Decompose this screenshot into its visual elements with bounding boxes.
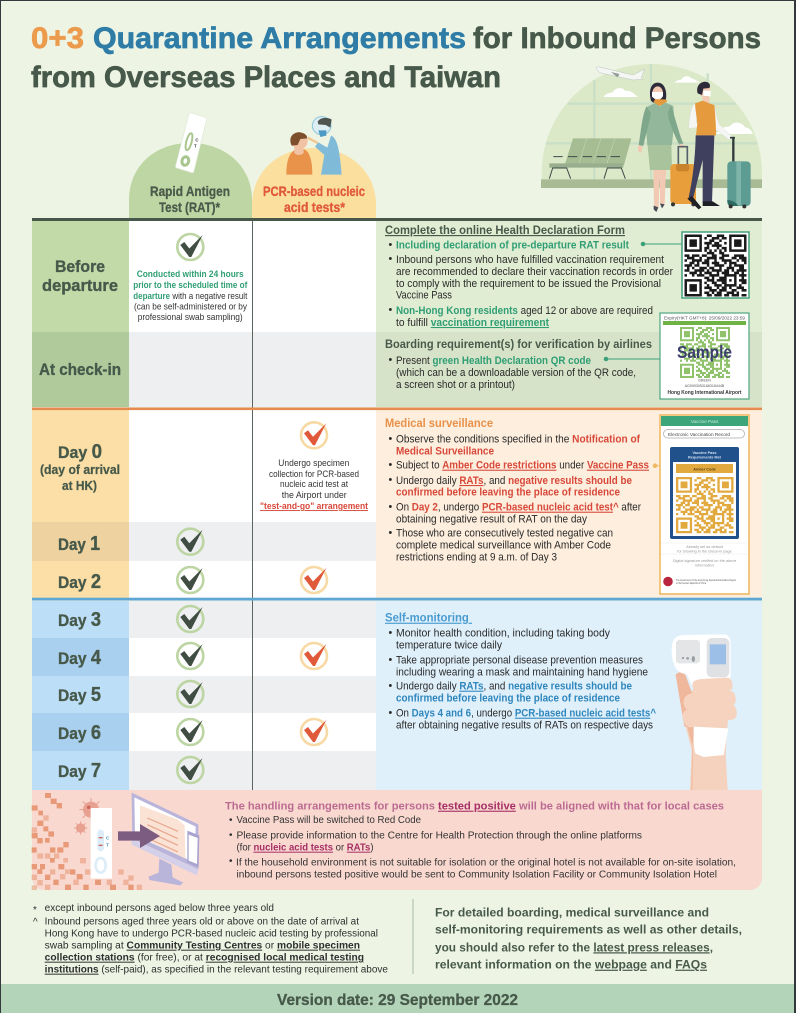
panel: medical surveillance (376, 410, 762, 598)
health declaration bullets: Inbound persons who have fulfilled vaccination requirement (396, 254, 664, 266)
self-monitoring bullets: • (388, 654, 392, 666)
row label: Day 3 (32, 601, 129, 638)
row label: Day 0: (day of arrival (40, 462, 120, 477)
positive case bullets: inbound persons tested positive would be sent to Community Isolation Facility or Community Isolation Hotel (236, 869, 717, 880)
illustration: test kit to computer: T (106, 843, 109, 848)
footnotes: * (33, 905, 37, 916)
footnotes: Inbound persons aged three years old or above on the date of arrival at (45, 917, 359, 928)
heading: boarding requirements: Boarding requirement(s) for verification by airlines (385, 338, 652, 351)
health declaration bullets: to comply with the requirement to be issued the Provisional (396, 278, 661, 290)
column header: PCR: acid tests* (284, 200, 346, 215)
RAT checks (177, 234, 203, 783)
boarding bullets: a screen shot or a printout) (396, 379, 515, 391)
positive case bullets (229, 815, 736, 880)
phone screen: vaccine pass amber code: Vaccine Pass (691, 419, 719, 424)
positive case bullets: (for nucleic acid tests or RATs) (236, 843, 373, 854)
row label: Day 0 (32, 410, 129, 522)
sample QR card: Hong Kong International Airport (668, 390, 742, 396)
surveillance bullets: • (388, 459, 392, 471)
icon: hand with thermometer (672, 634, 737, 790)
footnotes: collection stations (for free), or at recognised local medical testing (45, 953, 364, 964)
row label: Day 0: at HK) (62, 478, 97, 493)
phone screen: vaccine pass amber code: Digital signature verified on the above (673, 559, 736, 563)
footnotes: except inbound persons aged below three years old (45, 903, 274, 914)
sample QR card (660, 313, 749, 399)
self-monitoring bullets: • (388, 707, 392, 719)
row label: Day 6 (32, 713, 129, 751)
self-monitoring bullets: confirmed before leaving the place of residence (396, 693, 620, 705)
version date band: Version date: 29 September 2022 (277, 992, 518, 1009)
positive case bullets: Please provide information to the Centre for Health Protection through the online platforms (236, 831, 642, 842)
RAT pre-departure note: prior to the scheduled time of (133, 280, 248, 290)
QR code: health declaration (682, 232, 749, 298)
column header: PCR: PCR-based nucleic (263, 184, 365, 199)
PCR arrival note (260, 458, 368, 511)
man (687, 82, 732, 209)
footnotes: ^ (33, 917, 38, 928)
health declaration bullets: • (388, 253, 392, 265)
self-monitoring bullets: after obtaining negative results of RATs on respective days (396, 720, 653, 732)
table (32, 221, 376, 790)
footnotes: swab sampling at Community Testing Centres or mobile specimen (45, 941, 360, 952)
health declaration bullets: are recommended to declare their vaccination records in order (396, 266, 673, 278)
connector to phone (653, 464, 660, 468)
footnotes (33, 903, 389, 976)
icon: RAT test kit (176, 113, 207, 173)
positive case bullets: • (229, 830, 233, 841)
column header: RAT: Test (RAT)* (159, 200, 221, 215)
section dividers (32, 218, 762, 600)
PCR checks (301, 422, 327, 745)
self-monitoring bullets: • (388, 680, 392, 692)
title (31, 22, 761, 94)
self-monitoring bullets (388, 627, 656, 732)
phone screen: vaccine pass amber code: Already set as default (686, 545, 724, 549)
sample QR card: AG0993053166318444B (685, 384, 725, 388)
row label: Day 2: Day 2 (58, 571, 101, 593)
row label: Day 5 (32, 676, 129, 713)
further information note: you should also refer to the latest press releases, (435, 940, 713, 954)
woman (638, 83, 684, 212)
surveillance bullets: • (388, 474, 392, 486)
column header: PCR (252, 117, 376, 219)
phone screen: vaccine pass amber code: Electronic Vaccination Record (668, 432, 731, 437)
RAT pre-departure note (133, 269, 248, 322)
row label: Day 4 (32, 638, 129, 676)
surveillance bullets: complete medical surveillance with Amber Code (396, 540, 611, 552)
surveillance bullets: obtaining negative result of RAT on the day (396, 514, 588, 526)
orange suitcase (670, 147, 696, 206)
PCR arrival note: the Airport under (282, 490, 347, 500)
row label: Before departure: Before (55, 257, 105, 276)
surveillance bullets (388, 433, 649, 564)
self-monitoring bullets: Undergo daily RATs, and negative results should be (396, 681, 632, 693)
surveillance bullets: Subject to Amber Code restrictions under Vaccine Pass (396, 460, 649, 472)
phone screen: vaccine pass amber code: information (695, 564, 714, 568)
surveillance bullets: • (388, 501, 392, 513)
boarding bullets: • (388, 354, 392, 366)
surveillance bullets: Medical Surveillance (396, 446, 494, 458)
panel: pre-departure and check-in (376, 221, 762, 407)
positive case bullets: If the household environment is not suitable for isolation or the original hotel is not available for on-site isolation, (236, 857, 736, 868)
row label: Before departure (32, 221, 129, 332)
row label: Day 5: Day 5 (58, 684, 101, 706)
icon: RAT test kit: C (195, 138, 198, 143)
surveillance bullets: confirmed before leaving the place of residence (396, 487, 620, 499)
row label: Day 7: Day 7 (58, 760, 101, 782)
further information note: self-monitoring requirements as well as other details, (435, 923, 742, 937)
teal suitcase (727, 138, 751, 208)
title: 0+3 (31, 22, 84, 55)
surveillance bullets: restrictions ending at 9 a.m. of Day 3 (396, 552, 557, 564)
further information note: relevant information on the webpage and FAQs (435, 958, 707, 972)
positive case bullets: • (229, 856, 233, 867)
illustration: test kit to computer: C (106, 836, 109, 841)
surveillance bullets: • (388, 433, 392, 445)
row label: Day 4: Day 4 (58, 647, 102, 669)
row label: Day 1 (32, 522, 129, 561)
illustration: airport travellers (541, 64, 762, 212)
further information note: For detailed boarding, medical surveillance and (435, 906, 709, 920)
row label: Day 0: Day 0 (58, 441, 102, 463)
self-monitoring bullets: including wearing a mask and maintaining hand hygiene (396, 667, 648, 679)
footnotes: Hong Kong have to undergo PCR-based nucleic acid testing by professional (45, 929, 378, 940)
footnotes: institutions (self-paid), as specified in the relevant testing requirement above (45, 965, 389, 976)
phone screen: vaccine pass amber code: Requirements Met (688, 456, 722, 460)
health declaration bullets: • (388, 304, 392, 316)
further information note (435, 906, 742, 972)
row label: Day 1: Day 1 (58, 533, 100, 555)
connector to sample (604, 357, 660, 361)
column header: RAT: Rapid Antigen (150, 184, 230, 199)
icon: RAT test kit: T (194, 144, 197, 149)
health declaration bullets: to fulfill vaccination requirement (396, 317, 549, 329)
health declaration bullets: • (388, 239, 392, 251)
row label: Day 3: Day 3 (58, 609, 101, 631)
monitor (132, 793, 198, 869)
PCR arrival note: nucleic acid test at (280, 479, 348, 489)
surveillance bullets: Undergo daily RATs, and negative results should be (396, 475, 632, 487)
surveillance bullets: Observe the conditions specified in the Notification of (396, 434, 640, 446)
positive case bullets: • (229, 815, 233, 826)
illustration: test kit to computer (32, 793, 199, 890)
health declaration bullets: Vaccine Pass (396, 290, 452, 302)
sample QR card: GREEN (698, 378, 711, 382)
PCR arrival note: "test-and-go" arrangement (260, 501, 368, 511)
surveillance bullets: On Day 2, undergo PCR-based nucleic acid test^ after (396, 502, 641, 514)
health declaration bullets: Including declaration of pre-departure RAT result (396, 240, 629, 252)
PCR arrival note: collection for PCR-based (269, 469, 359, 479)
sample QR card: Sample (677, 342, 732, 362)
panel: tested positive (32, 790, 762, 890)
row label: At check-in: At check-in (39, 360, 121, 379)
title: from Overseas Places and Taiwan (31, 61, 501, 94)
connector to QR (641, 242, 682, 246)
RAT pre-departure note: (can be self-administered or by (134, 301, 247, 311)
health declaration bullets: Non-Hong Kong residents aged 12 or above are required (396, 305, 653, 317)
icon: swab sampling people (286, 117, 342, 175)
boarding bullets: Present green Health Declaration QR code (396, 355, 591, 367)
self-monitoring bullets: On Days 4 and 6, undergo PCR-based nucleic acid tests^ (396, 708, 656, 720)
sample QR card: Expiry(HKT GMT+8): 25/09/2022 23:59 (664, 316, 745, 320)
self-monitoring bullets: Take appropriate personal disease prevention measures (396, 655, 643, 667)
health declaration bullets (388, 239, 673, 329)
self-monitoring bullets: Monitor health condition, including taking body (396, 628, 611, 640)
row label: Day 7 (32, 751, 129, 790)
chairs (549, 138, 631, 179)
heading: self-monitoring: Self-monitoring (385, 612, 472, 625)
RAT pre-departure note: Conducted within 24 hours (137, 269, 244, 279)
phone screen: vaccine pass amber code: Vaccine Pass (692, 451, 717, 455)
heading: tested positive: The handling arrangements for persons tested positive will be aligned with that for local cases (225, 801, 724, 813)
row label: Day 2 (32, 561, 129, 598)
positive case bullets: Vaccine Pass will be switched to Red Code (236, 815, 421, 826)
row label: At check-in (32, 332, 129, 407)
RAT pre-departure note: departure with a negative result (133, 291, 248, 301)
row label: Before departure: departure (42, 276, 118, 295)
self-monitoring bullets: • (388, 627, 392, 639)
title: for Inbound Persons (473, 22, 761, 55)
phone screen: vaccine pass amber code (660, 415, 749, 594)
column header: RAT (129, 113, 252, 219)
surveillance bullets: Those who are consecutively tested negative can (396, 528, 613, 540)
heading: health declaration: Complete the online Health Declaration Form (385, 224, 625, 237)
version date band (1, 984, 794, 1013)
phone screen: vaccine pass amber code: of the People's Republic of China (676, 581, 706, 585)
phone screen: vaccine pass amber code: Amber Code (693, 468, 716, 472)
boarding bullets: (which can be a downloadable version of the QR code, (396, 367, 636, 379)
title: Quarantine Arrangements (93, 22, 466, 55)
row label: Day 6: Day 6 (58, 722, 101, 744)
phone screen: vaccine pass amber code: The Government of the Hong Kong Special Administrative Region (676, 578, 736, 582)
self-monitoring bullets: temperature twice daily (396, 640, 503, 652)
surveillance bullets: • (388, 527, 392, 539)
boarding bullets (388, 354, 636, 391)
panel: self-monitoring (376, 601, 762, 790)
heading: medical surveillance: Medical surveillance (385, 417, 494, 430)
RAT pre-departure note: professional swab sampling) (138, 312, 243, 322)
phone screen: vaccine pass amber code: for showing in the check-in page (677, 550, 732, 554)
PCR arrival note: Undergo specimen (278, 458, 349, 468)
